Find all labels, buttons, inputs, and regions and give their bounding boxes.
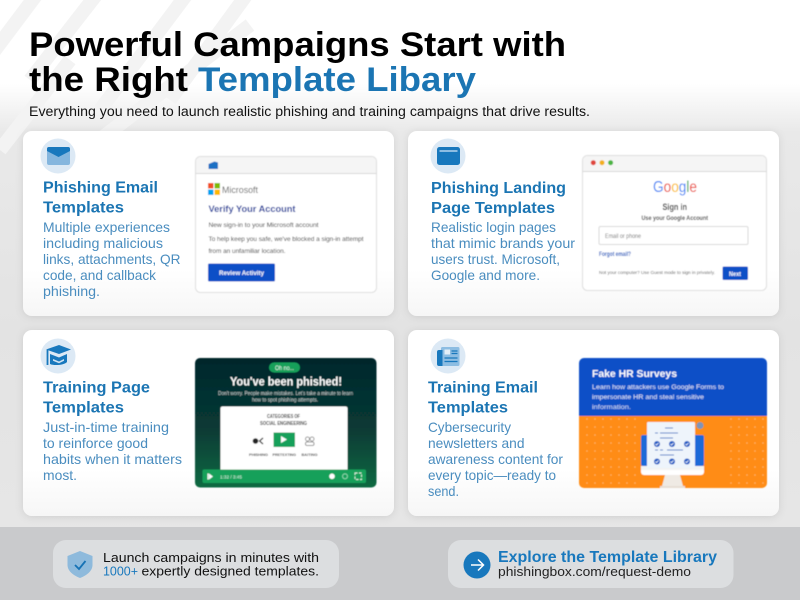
heading (428, 380, 538, 416)
newsletter mockup: fake HR surveys: Fake HR Surveys (592, 368, 677, 380)
icon: envelope (40, 138, 76, 174)
title: Template Libary (198, 61, 476, 99)
description: Just-in-time training (43, 419, 169, 435)
description: Multiple experiences (43, 219, 170, 235)
description: links, attachments, QR (43, 251, 180, 267)
description: send. (428, 483, 459, 499)
description (43, 219, 180, 299)
footer band (0, 527, 800, 600)
description: habits when it matters (43, 451, 182, 467)
description (431, 219, 575, 283)
description (43, 419, 182, 483)
icon: newsletter (430, 338, 466, 374)
icon: arrow (464, 552, 490, 578)
video mockup: you've been phished: SOCIAL ENGINEERING (260, 421, 307, 427)
email mockup: Microsoft: To help keep you safe, we've blocked a sign-in attempt (208, 236, 364, 243)
title (29, 26, 566, 99)
video mockup: you've been phished: CATEGORIES OF (267, 414, 300, 420)
video mockup: you've been phished: BAITING (302, 452, 318, 457)
callout: explore the template library (448, 540, 734, 588)
newsletter mockup: fake HR surveys: impersonate HR and steal sensitive (592, 394, 704, 401)
browser mockup: Google sign in: Sign in (662, 202, 687, 212)
description: code, and callback (43, 267, 157, 283)
description: Realistic login pages (431, 219, 556, 235)
heading: Phishing Landing (431, 180, 566, 197)
panel: phishing landing page templates (408, 131, 779, 316)
browser mockup: Google sign in: Use your Google Account (642, 216, 708, 222)
callout: launch campaigns: expertly designed templates. (142, 564, 319, 578)
button: review activity (208, 264, 275, 282)
video mockup: you've been phished: how to spot phishing attempts. (252, 398, 318, 404)
video mockup: you've been phished: Don't worry. People make mistakes. Let's take a minute to learn (218, 391, 353, 397)
browser mockup: Google sign in: Email or phone (605, 234, 642, 240)
email mockup: Microsoft: from an unfamiliar location. (208, 248, 286, 255)
browser mockup: Google sign in: Not your computer? Use Guest mode to sign in privately. (599, 270, 715, 276)
button: review activity: Review Activity (219, 270, 264, 277)
video mockup: you've been phished: You've been phished! (230, 374, 342, 388)
browser mockup: Google sign in (582, 156, 766, 290)
heading (43, 180, 158, 216)
description: phishing. (43, 283, 100, 299)
description: to reinforce good (43, 435, 148, 451)
logo: Google: Google (653, 179, 697, 196)
newsletter mockup: fake HR surveys: information. (592, 404, 631, 411)
description: most. (43, 467, 77, 483)
panel: training email templates (408, 330, 779, 516)
button: next (722, 266, 748, 280)
newsletter mockup: fake HR surveys: Learn how attackers use Google Forms to (592, 384, 724, 391)
icon: browser window (430, 138, 466, 174)
heading: Templates (43, 400, 124, 416)
heading (431, 180, 566, 217)
callout: launch campaigns: Launch campaigns in minutes with (103, 550, 319, 565)
description: awareness content for (428, 451, 563, 467)
icon: shield (68, 551, 92, 578)
subtitle: Everything you need to launch realistic phishing and training campaigns that drive results. (29, 104, 590, 119)
heading: Page Templates (431, 200, 555, 217)
heading: Phishing Email (43, 180, 158, 196)
title: Powerful Campaigns Start with (29, 26, 566, 64)
description: newsletters and (428, 435, 524, 451)
email mockup: Microsoft: New sign-in to your Microsoft account (208, 222, 319, 229)
video mockup: you've been phished: Oh no... (275, 366, 294, 372)
callout: launch campaigns: 1000+ (103, 564, 138, 578)
panel: phishing email templates (23, 131, 394, 316)
video mockup: you've been phished: PHISHING (249, 452, 268, 457)
heading: Training Email (428, 380, 538, 396)
callout: explore the template library: Explore the Template Library (498, 549, 717, 566)
heading: Templates (428, 400, 508, 416)
email mockup: Microsoft: Microsoft (222, 185, 258, 195)
browser mockup: Google sign in: Forgot email? (599, 252, 631, 258)
heading: Templates (43, 200, 124, 216)
heading: Training Page (43, 380, 150, 396)
video mockup: you've been phished (195, 358, 376, 488)
callout: launch campaigns (53, 540, 339, 588)
newsletter mockup: fake HR surveys (579, 358, 767, 488)
description: Cybersecurity (428, 419, 511, 435)
illustration: survey on monitor (641, 422, 704, 488)
button: next: Next (729, 272, 741, 278)
video mockup: you've been phished: PRETEXTING (272, 452, 296, 457)
email mockup: Microsoft (196, 156, 376, 292)
description: users trust. Microsoft, (431, 251, 560, 267)
video control bar: 1:32 / 3:45 (220, 474, 242, 480)
icon: graduation cap (40, 338, 76, 374)
heading (43, 380, 150, 416)
email mockup: Microsoft: Verify Your Account (208, 204, 296, 214)
description: Google and more. (431, 267, 540, 283)
callout: explore the template library: phishingbox.com/request-demo (498, 564, 691, 579)
panel: training page templates (23, 330, 394, 516)
description: that mimic brands your (431, 235, 575, 251)
description: including malicious (43, 235, 163, 251)
title: the Right (29, 61, 188, 99)
description (428, 419, 563, 499)
video control bar (202, 470, 366, 483)
description: every topic—ready to (428, 467, 556, 483)
